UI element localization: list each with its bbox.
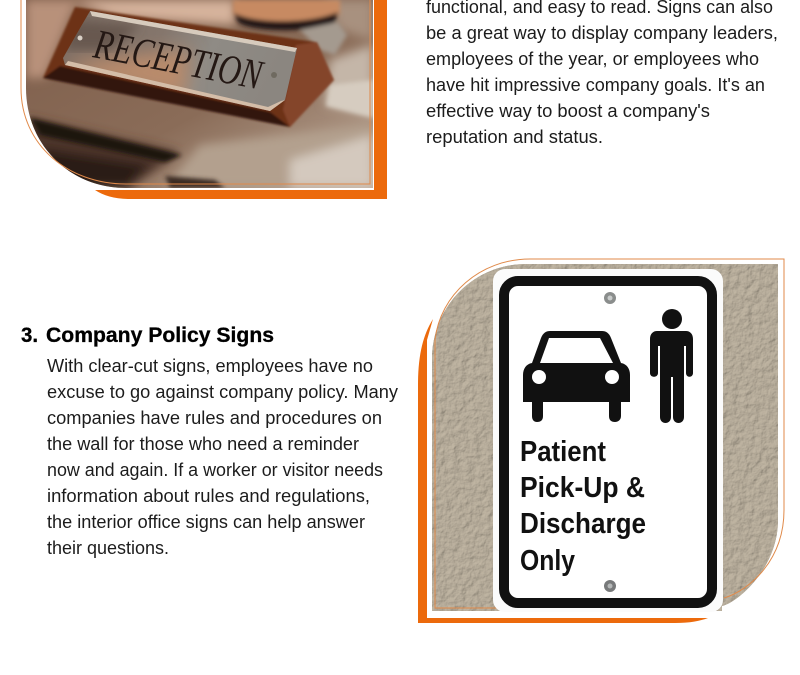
text block: company policy description: now and again. If a worker or visitor needs xyxy=(47,460,383,480)
heading: company policy signs: 3. xyxy=(21,324,38,347)
metal plate xyxy=(63,11,297,111)
text block: company policy description: information about rules and regulations, xyxy=(47,486,370,506)
text block: company policy description xyxy=(47,356,398,558)
text block: intro paragraph continued: effective way to boost a company's xyxy=(426,101,710,121)
icon: screw top xyxy=(604,292,616,304)
orange frame: reception photo xyxy=(95,0,387,199)
panel: reception photo xyxy=(21,0,387,199)
text block: company policy description: excuse to go against company policy. Many xyxy=(47,382,398,402)
heading: company policy signs: Company Policy Signs xyxy=(46,324,274,347)
thin orange outline: parking sign photo xyxy=(435,259,784,608)
thin orange outline: reception photo xyxy=(21,0,370,184)
panel: parking sign photo xyxy=(418,259,784,623)
text block: intro paragraph continued: be a great way to display company leaders, xyxy=(426,23,778,43)
parking sign xyxy=(493,269,723,612)
text: sign wording: Discharge xyxy=(520,508,646,540)
text block: company policy description: companies have rules and procedures on xyxy=(47,408,382,428)
photo: textured wall xyxy=(432,264,780,611)
text block: company policy description: the interior office signs can help answer xyxy=(47,512,365,532)
orange frame: parking sign photo xyxy=(418,319,708,623)
text block: intro paragraph continued: have hit impressive company goals. It's an xyxy=(426,75,765,95)
text: sign wording: Patient xyxy=(520,436,606,468)
text: sign wording xyxy=(520,436,646,577)
icon: screw bottom xyxy=(604,580,616,592)
text block: intro paragraph continued: employees of the year, or employees who xyxy=(426,49,759,69)
text: sign wording: Pick-Up & xyxy=(520,472,645,504)
icon: person xyxy=(650,309,693,423)
text block: company policy description: the wall for those who need a reminder xyxy=(47,434,359,454)
text block: company policy description: With clear-cut signs, employees have no xyxy=(47,356,373,376)
icon: car xyxy=(523,331,630,422)
text: sign wording: Only xyxy=(520,545,575,577)
photo: reception desk nameplate xyxy=(26,0,373,188)
wooden nameplate wedge xyxy=(43,7,334,127)
text: RECEPTION engraving: RECEPTION xyxy=(89,22,267,100)
text block: intro paragraph continued: reputation and status. xyxy=(426,127,603,147)
text block: company policy description: their questions. xyxy=(47,538,169,558)
text block: intro paragraph continued xyxy=(426,0,778,147)
